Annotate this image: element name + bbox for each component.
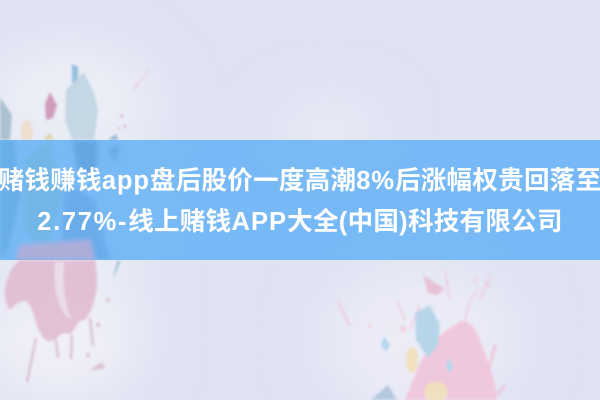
crystals upper left xyxy=(0,64,148,144)
splash lower right xyxy=(338,270,505,400)
banner xyxy=(0,140,600,260)
title line 2: 2.77%-线上赌钱APP大全(中国)科技有限公司 xyxy=(37,208,563,236)
title line 1: 赌钱赚钱app盘后股价一度高潮8%后涨幅权贵回落至 xyxy=(0,167,600,195)
artwork showing through banner xyxy=(0,140,120,260)
splash lower left xyxy=(5,260,120,382)
